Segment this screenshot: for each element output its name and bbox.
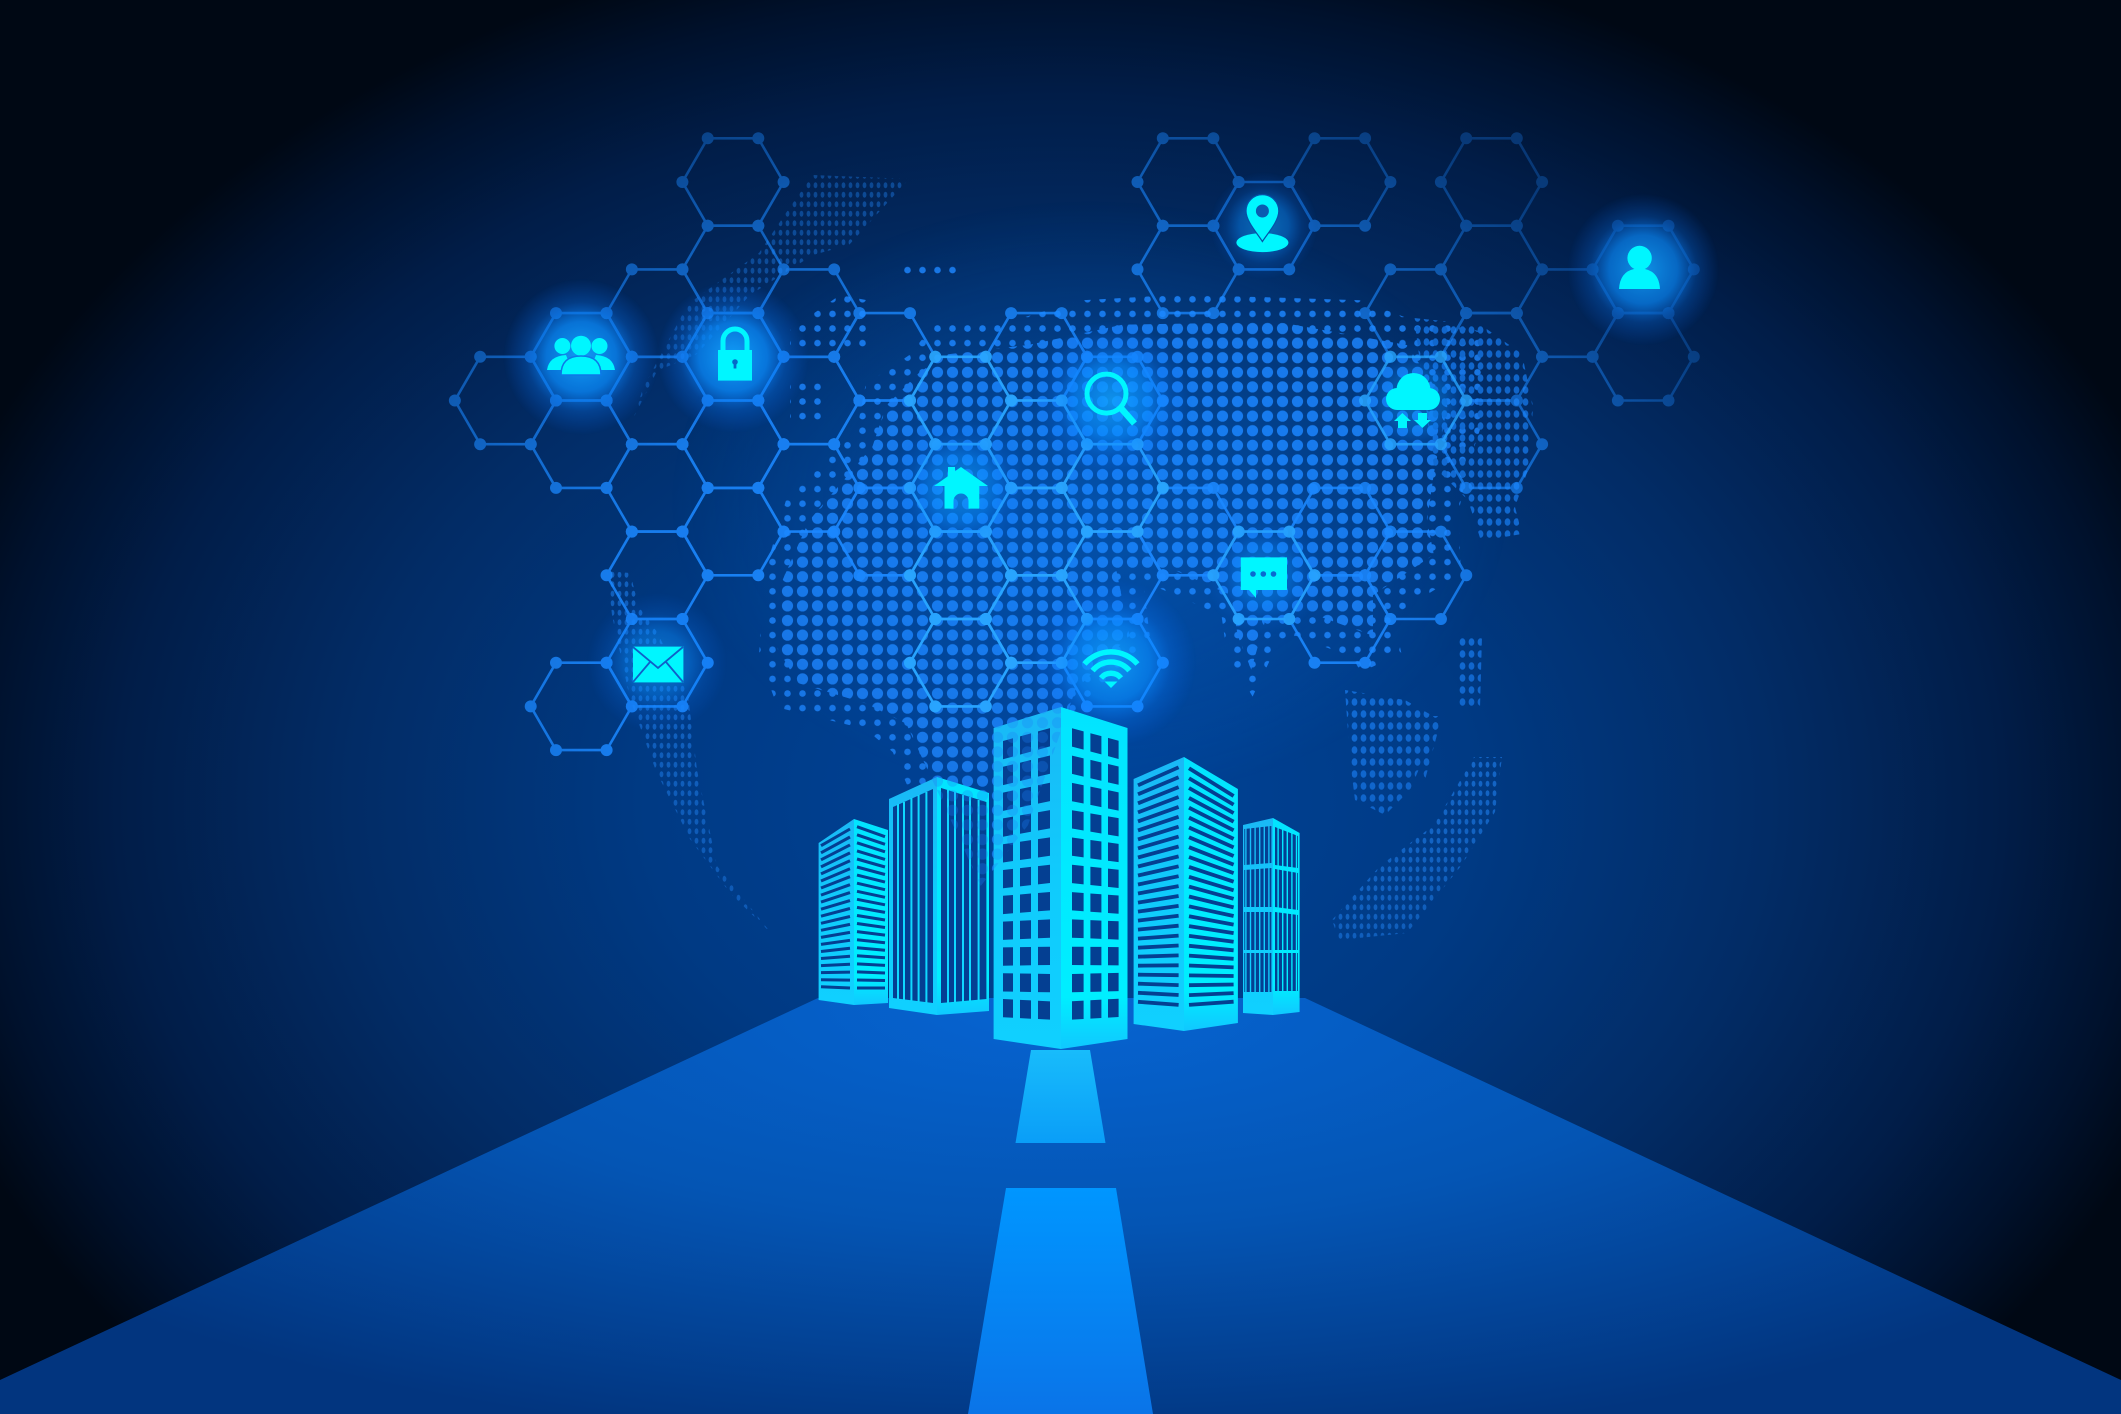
building: far-right floors <box>1243 818 1300 1015</box>
road: near dash <box>968 1188 1153 1414</box>
icon: magnifier <box>1087 374 1134 424</box>
map: Australia dots <box>1332 757 1502 940</box>
road: far dash <box>1016 1050 1106 1143</box>
central map glow <box>600 150 1600 850</box>
map: far-east compressed dots <box>1414 318 1533 541</box>
icon: envelope <box>633 647 683 682</box>
building: far-left louvered <box>819 819 888 1005</box>
icon: padlock <box>718 329 752 381</box>
map: Indonesia and Philippines <box>1345 636 1482 815</box>
map dots showing through buildings <box>932 707 1061 886</box>
ground plane <box>0 998 2121 1414</box>
building: tall vertical-glazed <box>889 777 989 1015</box>
building: central tower <box>994 707 1128 1049</box>
tower: right face windows <box>1072 728 1119 1020</box>
icon glows <box>503 172 1719 747</box>
icon: chat bubble <box>1241 557 1287 598</box>
hexagon network <box>449 132 1700 756</box>
tower: left face windows <box>1003 728 1050 1020</box>
icon: person <box>1619 246 1660 289</box>
map: Alaska stripe <box>634 175 909 417</box>
icon: wifi <box>1084 652 1138 688</box>
icon: cloud with arrows <box>1386 373 1440 428</box>
map: continents large dots <box>778 322 1448 871</box>
map: South America edge stripe <box>607 571 771 933</box>
map: small islands northwest <box>790 262 962 422</box>
map: continents small halftone dots <box>759 296 1481 784</box>
bright central hexagons <box>904 351 1472 712</box>
dotted world map <box>610 175 1533 939</box>
icon: house <box>934 467 988 509</box>
building: right louvered <box>1134 757 1238 1031</box>
icon: location pin <box>1236 195 1288 252</box>
icon: people group <box>547 336 615 375</box>
